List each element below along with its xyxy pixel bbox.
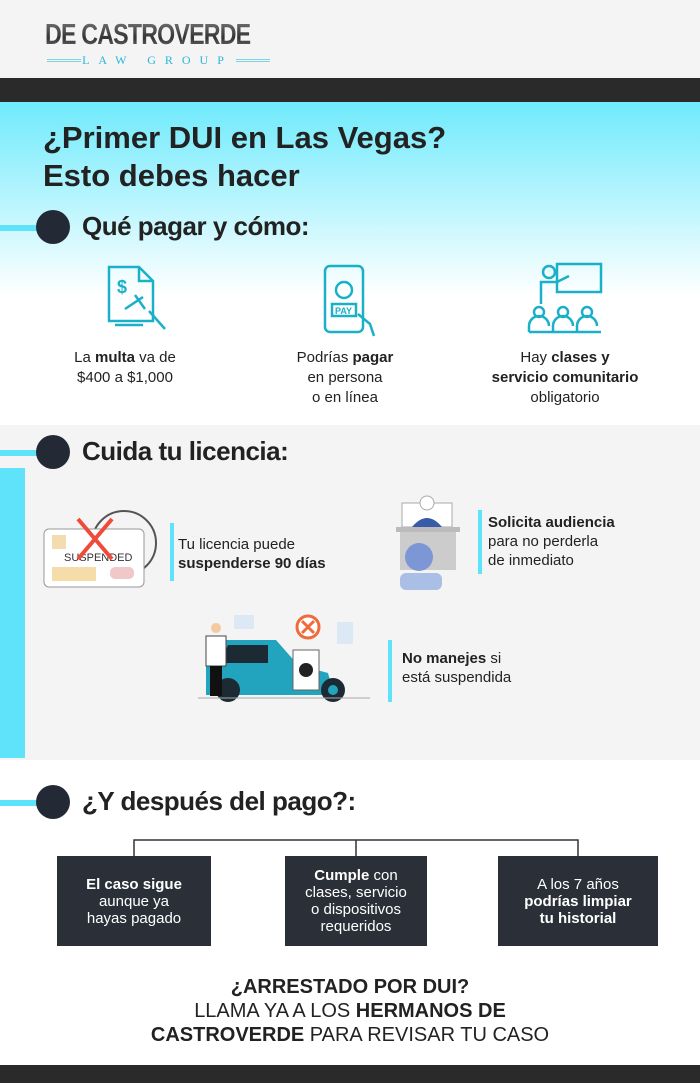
call to action: ¿ARRESTADO POR DUI? [231, 976, 469, 998]
title [43, 120, 446, 193]
icon: phone pay [324, 264, 376, 336]
heading 3 [0, 785, 356, 819]
box: caso sigue [57, 856, 211, 946]
text: audiencia: de inmediato [488, 552, 574, 569]
text: audiencia: Solicita audiencia [488, 514, 615, 531]
section 1 [0, 102, 700, 425]
heading 2 [0, 435, 288, 469]
logo [45, 19, 270, 67]
text: suspender [170, 523, 326, 581]
call to action: LLAMA YA A LOS HERMANOS DE [194, 1000, 506, 1022]
heading 1: Qué pagar y cómo: [82, 211, 309, 241]
box: cumple: o dispositivos [311, 901, 401, 918]
text: pagar: Podrías pagar [297, 349, 393, 366]
icon: invoice gavel: $ [117, 277, 127, 297]
box: caso sigue: El caso sigue [86, 876, 182, 892]
icon: invoice gavel [108, 266, 166, 330]
box: cumple: clases, servicio [305, 884, 407, 901]
text: no manejes [388, 640, 512, 702]
box: caso sigue: hayas pagado [87, 910, 181, 926]
text: suspender: suspenderse 90 días [178, 555, 326, 572]
icon: car [198, 614, 370, 702]
text: multa: $400 a $1,000 [77, 369, 173, 386]
text: clases: obligatorio [530, 389, 600, 406]
icon: class [528, 262, 602, 334]
call to action [151, 976, 549, 1046]
box: caso sigue: aunque ya [99, 892, 169, 910]
text: clases [492, 349, 638, 406]
section 2 [0, 425, 700, 760]
heading 3: ¿Y después del pago?: [82, 786, 356, 816]
call to action: CASTROVERDE PARA REVISAR TU CASO [151, 1024, 549, 1046]
box: cumple [285, 856, 427, 946]
text: pagar: o en línea [312, 389, 378, 406]
icon: judge hearing [396, 496, 460, 590]
connector lines [133, 839, 579, 856]
heading 1 [0, 210, 309, 244]
dark bar [0, 78, 700, 102]
footer bar [0, 1065, 700, 1083]
heading 2: Cuida tu licencia: [82, 436, 288, 466]
text: pagar [297, 349, 394, 406]
text: multa [74, 349, 176, 386]
text: pagar: en persona [307, 369, 383, 386]
text: no manejes: está suspendida [402, 669, 511, 686]
title: Esto debes hacer [43, 158, 300, 193]
header [0, 0, 700, 78]
text: audiencia [478, 510, 615, 574]
box: cumple: requeridos [321, 918, 391, 935]
text: multa: La multa va de [74, 349, 176, 366]
text: clases: servicio comunitario [492, 369, 638, 386]
text: audiencia: para no perderla [488, 533, 598, 550]
title: ¿Primer DUI en Las Vegas? [43, 120, 446, 155]
box: cumple: Cumple con [314, 867, 398, 884]
text: suspender: Tu licencia puede [178, 536, 295, 553]
text: no manejes: No manejes si [402, 650, 501, 667]
logo: DE CASTROVERDE [45, 19, 250, 51]
box: 7 años: A los 7 años [537, 876, 619, 892]
icon: suspended license [44, 510, 157, 588]
icon: suspended license: SUSPENDED [64, 552, 133, 564]
text: clases: Hay clases y [520, 349, 610, 366]
icon: phone pay: PAY [335, 306, 352, 316]
box: 7 años: podrías limpiar [524, 892, 632, 910]
box: 7 años [498, 856, 658, 946]
box: 7 años: tu historial [540, 910, 616, 926]
logo: LAW GROUP [82, 53, 233, 67]
